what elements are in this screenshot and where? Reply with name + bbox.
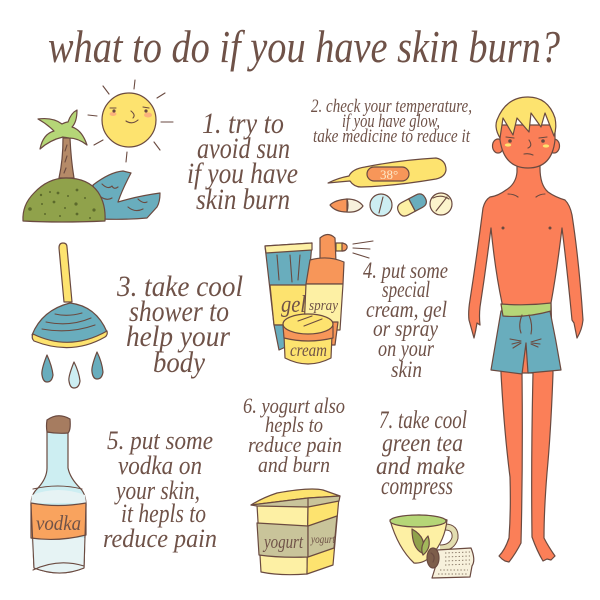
text: step 3 <box>116 270 243 379</box>
text: step 6: hepls to <box>265 412 323 437</box>
text: step 6: 6. yogurt also <box>243 393 345 418</box>
text: step 4: skin <box>391 357 422 382</box>
handle <box>440 527 455 548</box>
text: step 7: compress <box>381 473 453 500</box>
icon: sun and island <box>23 80 173 222</box>
text: step 5: reduce pain <box>103 524 217 553</box>
text: step 1: skin burn <box>196 183 290 216</box>
icon: gel, spray and cream <box>265 234 373 364</box>
text: step 6: and burn <box>258 452 330 477</box>
text: step 7: 7. take cool <box>379 407 467 434</box>
icon: green tea cup and bandage <box>390 515 474 578</box>
text: step 1: if you have <box>187 157 298 190</box>
text: step 4: special <box>382 277 430 302</box>
icon: yogurt box: yogurt <box>310 532 335 546</box>
icon: yogurt box: yogurt <box>262 532 304 553</box>
text: step 2: if you have glow, <box>342 111 440 132</box>
text: step 5: 5. put some <box>107 426 213 455</box>
text: step 3: body <box>153 346 206 379</box>
text: step 6 <box>243 393 345 477</box>
text: step 3: help your <box>126 320 230 353</box>
text: step 5: vodka on <box>118 451 202 480</box>
text: step 5 <box>103 426 217 553</box>
figure: sunburned boy <box>469 97 583 562</box>
text: step 3: shower to <box>129 295 229 328</box>
sea waves <box>93 171 160 219</box>
text: step 6: reduce pain <box>248 432 342 457</box>
sun <box>88 80 173 162</box>
face <box>505 137 549 155</box>
shorts <box>491 303 561 374</box>
icon: thermometer: 38° <box>380 167 398 182</box>
island <box>23 178 105 222</box>
icon: vodka bottle: vodka <box>36 511 81 535</box>
cup <box>390 515 447 563</box>
text: step 5: your skin, <box>114 476 200 505</box>
text: step 2: 2. check your temperature, <box>311 96 472 117</box>
icon: pills <box>330 192 452 218</box>
text: step 7: and make <box>376 453 465 480</box>
text: step 2: take medicine to reduce it <box>313 126 471 147</box>
icon: vodka bottle <box>31 416 86 573</box>
text: step 3: 3. take cool <box>116 270 243 303</box>
icon: thermometer <box>328 158 446 187</box>
ears <box>492 139 504 153</box>
text: step 2 <box>311 96 472 147</box>
cream jar: cream <box>290 340 327 360</box>
text: step 4: or spray <box>373 316 439 341</box>
water drops <box>42 352 103 388</box>
head <box>500 125 555 168</box>
spray bottle: spray <box>309 298 338 314</box>
text: step 1: 1. try to <box>202 107 284 140</box>
text: step 4 <box>363 258 448 382</box>
palm tree <box>59 138 74 178</box>
chest details <box>508 194 545 197</box>
icon: yogurt box <box>251 489 340 575</box>
text: step 1: avoid sun <box>197 132 290 165</box>
text: step 7: green tea <box>382 430 463 457</box>
text: step 1 <box>187 107 298 216</box>
text: step 4: cream, gel <box>366 297 447 322</box>
gel tube: gel <box>281 292 306 318</box>
icon: shower head <box>32 243 107 388</box>
tea leaves <box>412 529 429 555</box>
text: step 4: on your <box>378 336 435 361</box>
text: step 5: it hepls to <box>121 499 206 528</box>
body <box>469 165 583 562</box>
bandage roll <box>432 548 474 578</box>
text: step 7 <box>376 407 467 500</box>
hair <box>496 97 556 138</box>
text: step 4: 4. put some <box>363 258 448 283</box>
